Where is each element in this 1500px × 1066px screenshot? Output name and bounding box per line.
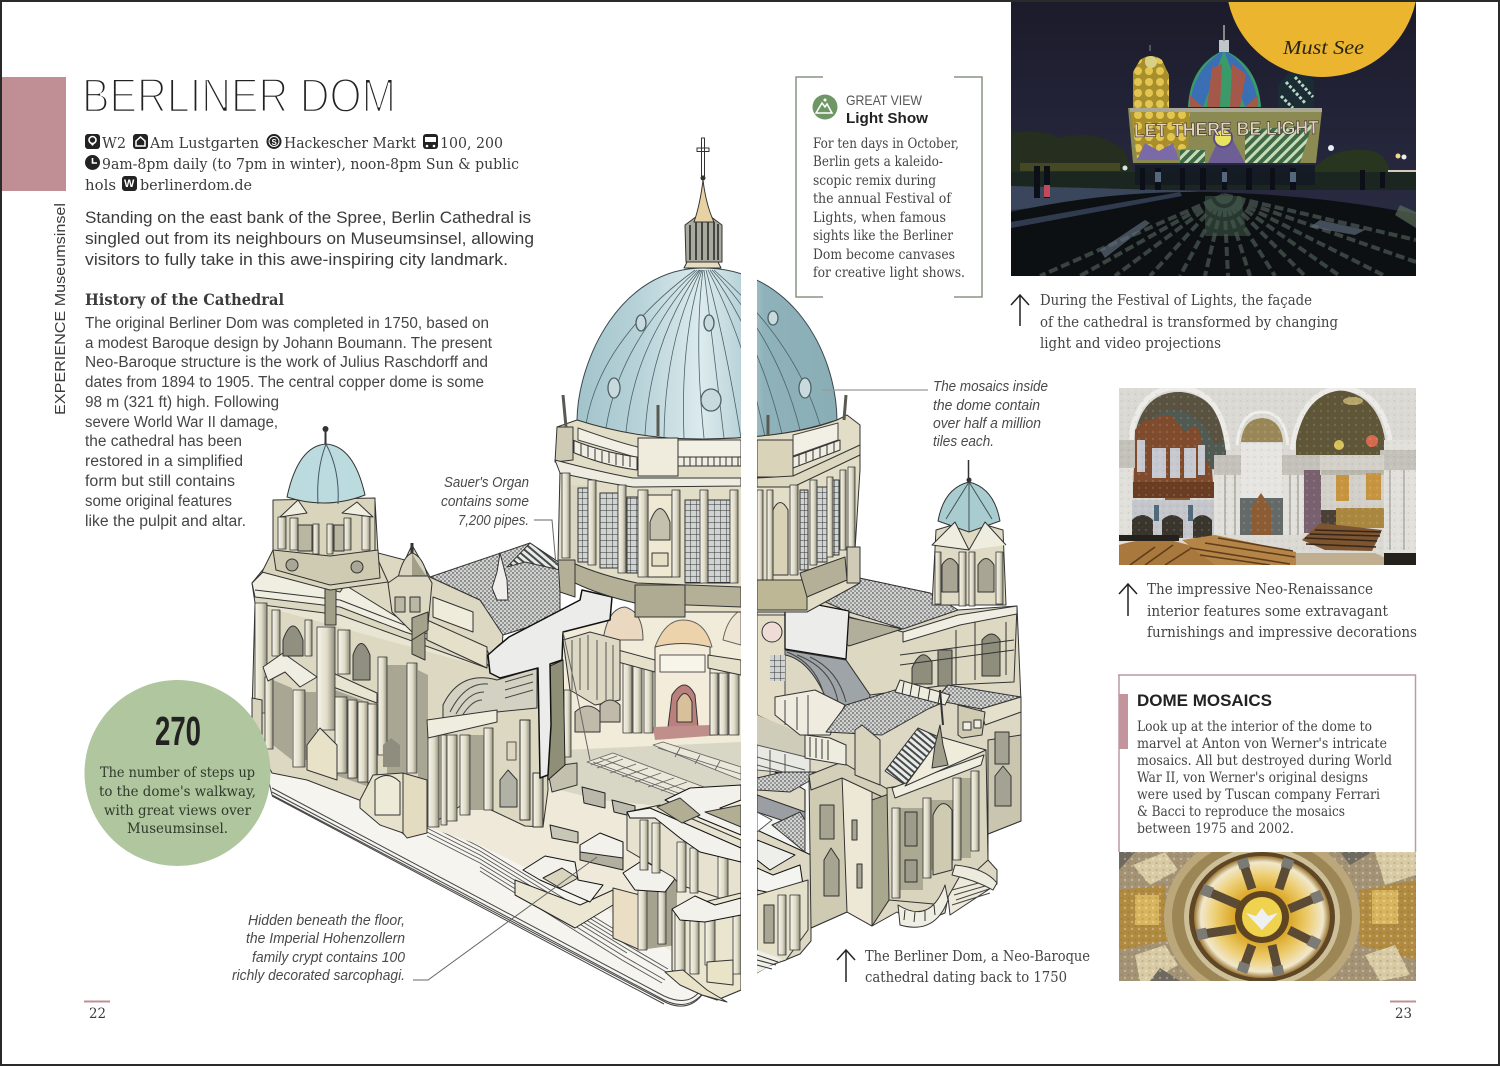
body text: history: The original Berliner Dom was completed in 1750, based on <box>85 315 489 332</box>
drum piers <box>555 427 573 462</box>
intro text: visitors to fully take in this awe-inspiring city landmark. <box>85 250 508 269</box>
upper panel <box>433 597 473 632</box>
spire on roof <box>492 553 508 600</box>
body text: history: dates from 1894 to 1905. The central copper dome is some <box>85 374 484 391</box>
organ gallery <box>1130 500 1214 538</box>
right corner tower <box>932 460 1006 606</box>
columns <box>255 603 493 827</box>
drum columns <box>562 467 855 583</box>
stat circle: 270 steps: 270 <box>155 708 201 754</box>
plaza and people <box>1011 172 1416 190</box>
pews <box>587 742 741 803</box>
lantern and cross <box>684 138 722 268</box>
stat circle: 270 steps <box>84 680 270 866</box>
organ-pipe roof hatch <box>507 543 560 570</box>
balustrade <box>568 438 637 470</box>
split between pages <box>741 268 757 1013</box>
drum <box>555 395 860 617</box>
intro text: Standing on the east bank of the Spree, Berlin Cathedral is <box>85 208 531 227</box>
upper wall <box>578 423 838 458</box>
body text: history: restored in a simplified <box>85 453 243 470</box>
panel: Dome Mosaics: were used by Tuscan company Ferrari <box>1137 787 1381 803</box>
section colour tab <box>2 77 66 191</box>
body text: history: severe World War II damage, <box>85 414 278 431</box>
panel: Dome Mosaics: marvel at Anton von Werner's intricate <box>1137 736 1387 752</box>
body text: history <box>85 315 493 530</box>
panel: Great View box: Lights, when famous <box>813 210 946 226</box>
stat circle: 270 steps: with great views over <box>104 803 251 819</box>
lower ring <box>573 563 741 607</box>
statues <box>563 395 846 436</box>
central drum niche <box>648 495 672 577</box>
panel: Great View box: Berlin gets a kaleido- <box>813 154 943 170</box>
right arch interior <box>1296 390 1385 455</box>
door <box>500 770 517 807</box>
callout: Sauer's Organ: contains some <box>441 494 529 510</box>
practical information: 9am-8pm daily (to 7pm in winter), noon-8pm Sun & public <box>102 157 519 173</box>
body text: history: some original features <box>85 493 232 510</box>
icon: website: W <box>124 178 135 190</box>
icon: S-Bahn: S <box>272 138 278 147</box>
stone piers <box>1130 440 1385 535</box>
left half: facade <box>252 500 548 838</box>
panel: Dome Mosaics: Look up at the interior of the dome to <box>1137 719 1372 735</box>
heading: history: History of the Cathedral <box>85 290 284 309</box>
body text: history: the cathedral has been <box>85 433 242 450</box>
pediment roof <box>885 728 941 785</box>
right interior vault <box>785 650 870 708</box>
caption: festival: light and video projections <box>1040 336 1221 352</box>
right interior: niche <box>757 615 800 735</box>
arrow <box>1119 584 1137 616</box>
panel: Dome Mosaics <box>1118 675 1416 852</box>
stat circle: 270 steps: Museumsinsel. <box>127 821 228 837</box>
page number: 22: 22 <box>89 1006 106 1022</box>
right roof <box>821 578 958 629</box>
white arch rims <box>1132 388 1390 470</box>
panel: Great View box: scopic remix during <box>813 173 936 189</box>
right cut wall (white section) <box>785 603 849 659</box>
central oculus <box>1235 891 1289 943</box>
icon: mountain <box>812 94 838 120</box>
icon: S-Bahn <box>266 134 282 149</box>
stat circle: 270 steps: to the dome's walkway, <box>99 784 256 800</box>
arched windows <box>283 626 370 680</box>
dome oculi <box>608 311 811 411</box>
practical information: hols <box>85 178 116 194</box>
panel: Great View box: Light Show <box>846 110 928 127</box>
projected text: LET THERE BE LIGHT <box>1134 118 1319 142</box>
practical information <box>85 134 519 194</box>
body text: history: 98 m (321 ft) high. Following <box>85 394 279 411</box>
photo: interior <box>1119 388 1416 565</box>
center half dome <box>1241 418 1283 442</box>
reflecting pool <box>1011 192 1416 276</box>
accent bar <box>1119 694 1128 749</box>
plinths <box>307 728 337 780</box>
practical information: 100, 200 <box>440 136 503 152</box>
right pews and cut walls <box>757 745 810 775</box>
shaded recesses <box>273 665 484 810</box>
photo: festival of lights <box>1011 2 1416 276</box>
panel: Great View box: GREAT VIEW <box>846 92 923 108</box>
panel: Great View box: the annual Festival of <box>813 191 952 207</box>
practical information: berlinerdom.de <box>140 178 252 194</box>
practical information: Am Lustgarten <box>149 136 259 152</box>
panel: Great View box: sights like the Berliner <box>813 228 953 244</box>
caption: festival: of the cathedral is transformed by changing <box>1040 315 1338 331</box>
caption: interior: interior features some extravagant <box>1147 604 1388 620</box>
panel: Great View box: For ten days in October, <box>813 136 959 152</box>
title: BERLINER DOM <box>82 70 396 123</box>
icon: address <box>133 134 148 149</box>
panel: Dome Mosaics: & Bacci to reproduce the mosaics <box>1137 804 1345 820</box>
glass panes <box>1194 856 1330 978</box>
right roof 2 <box>826 690 951 735</box>
callout: Sauer's Organ: 7,200 pipes. <box>458 513 529 529</box>
caption: interior: furnishings and impressive decorations <box>1147 625 1417 641</box>
side chapel arch <box>443 668 537 722</box>
right tower <box>1278 72 1314 108</box>
body text: history: Neo-Baroque structure is the work of Julius Raschdorff and <box>85 354 488 371</box>
balustrades <box>805 680 950 765</box>
callout: Sauer's Organ: Sauer's Organ <box>444 475 529 491</box>
caption: Berliner Dom <box>837 949 1090 986</box>
organ <box>1134 416 1213 482</box>
left half: steps and plinth <box>262 752 741 1006</box>
caption: festival: During the Festival of Lights, the façade <box>1040 293 1312 309</box>
left cut walls <box>488 590 612 780</box>
panel: Dome Mosaics: mosaics. All but destroyed during World <box>1137 753 1392 769</box>
stat circle: 270 steps: The number of steps up <box>100 765 255 781</box>
trees <box>1011 131 1135 175</box>
icon: map pin <box>85 134 100 149</box>
callout: Sauer's Organ <box>441 475 590 760</box>
arrow <box>837 950 855 982</box>
icon: clock <box>85 155 100 170</box>
chancel <box>1240 498 1283 535</box>
left roof <box>430 543 560 635</box>
page number: 23 <box>1390 1002 1416 1022</box>
ornate ceiling panels <box>1119 885 1170 950</box>
body text: history: like the pulpit and altar. <box>85 513 246 530</box>
intro text: singled out from its neighbours on Museumsinsel, allowing <box>85 229 534 248</box>
left interior apse <box>547 600 741 792</box>
must see badge <box>1226 0 1418 77</box>
panel: Dome Mosaics: DOME MOSAICS <box>1137 691 1272 710</box>
facade projection <box>1128 108 1322 163</box>
callout: mosaics: the dome contain <box>933 398 1040 414</box>
callout: crypt: family crypt contains 100 <box>252 950 405 966</box>
caption: Berliner Dom: The Berliner Dom, a Neo-Baroque <box>865 949 1090 965</box>
icon: website <box>122 176 137 191</box>
ribs <box>1197 859 1322 975</box>
callout: mosaics: The mosaics inside <box>933 379 1048 395</box>
cornice bands <box>252 572 500 678</box>
practical information: Hackescher Markt <box>284 136 416 152</box>
drum windows <box>570 485 588 565</box>
panel: Great View box: Dom become canvases <box>813 247 955 263</box>
icon: bus <box>423 134 438 149</box>
caption: interior: The impressive Neo-Renaissance <box>1147 582 1373 598</box>
caption: Berliner Dom: cathedral dating back to 1750 <box>865 970 1067 986</box>
arrow <box>1011 295 1029 326</box>
right half: body <box>757 578 1021 973</box>
intro text <box>85 208 534 269</box>
portico <box>887 738 988 905</box>
body text: history: a modest Baroque design by Johann Boumann. The present <box>85 335 493 352</box>
left corner tower <box>262 426 388 590</box>
left arch interior <box>1136 392 1226 470</box>
right wing side wall <box>988 735 1021 834</box>
left half: floor <box>427 735 741 990</box>
caption: festival <box>1011 293 1338 352</box>
panel: Great View box <box>796 77 982 297</box>
central dome <box>577 268 837 439</box>
practical information: W2 <box>102 136 126 152</box>
vertical section label: EXPERIENCE Museumsinsel <box>53 203 69 415</box>
callout: mosaics <box>822 379 1048 450</box>
page number: 23: 23 <box>1395 1006 1412 1022</box>
panel: Dome Mosaics: between 1975 and 2002. <box>1137 821 1294 837</box>
callout: mosaics: over half a million <box>933 416 1041 432</box>
callout: crypt <box>232 857 597 984</box>
right back wing <box>846 606 1017 695</box>
small left turret <box>388 543 432 640</box>
left tower <box>1133 56 1169 108</box>
page number: 22 <box>84 1002 110 1022</box>
pews <box>1119 540 1215 565</box>
callout: mosaics: tiles each. <box>933 434 994 450</box>
porch pediment <box>263 653 317 687</box>
panel: Dome Mosaics: War II, von Werner's original designs <box>1137 770 1368 786</box>
callout: crypt: richly decorated sarcophagi. <box>232 968 405 984</box>
callout: crypt: the Imperial Hohenzollern <box>246 931 405 947</box>
caption: interior <box>1119 582 1417 641</box>
crypt columns and cut piers <box>515 785 741 1002</box>
panel: Great View box: for creative light shows. <box>813 265 965 281</box>
white centre wall <box>1241 443 1282 498</box>
upper pilasters, dark <box>325 585 425 660</box>
callout: crypt: Hidden beneath the floor, <box>248 913 405 929</box>
turret <box>855 725 880 785</box>
entrance stairs <box>948 874 997 915</box>
photo: dome mosaic <box>1119 852 1416 981</box>
right front block <box>809 768 889 928</box>
dome ribs <box>586 270 820 438</box>
cathedral cutaway illustration <box>252 138 1021 1013</box>
outer rings <box>1164 852 1360 981</box>
drum cornice <box>555 460 741 487</box>
body text: history: form but still contains <box>85 473 235 490</box>
must see badge: Must See <box>1282 37 1364 59</box>
dome projection <box>1188 50 1261 107</box>
